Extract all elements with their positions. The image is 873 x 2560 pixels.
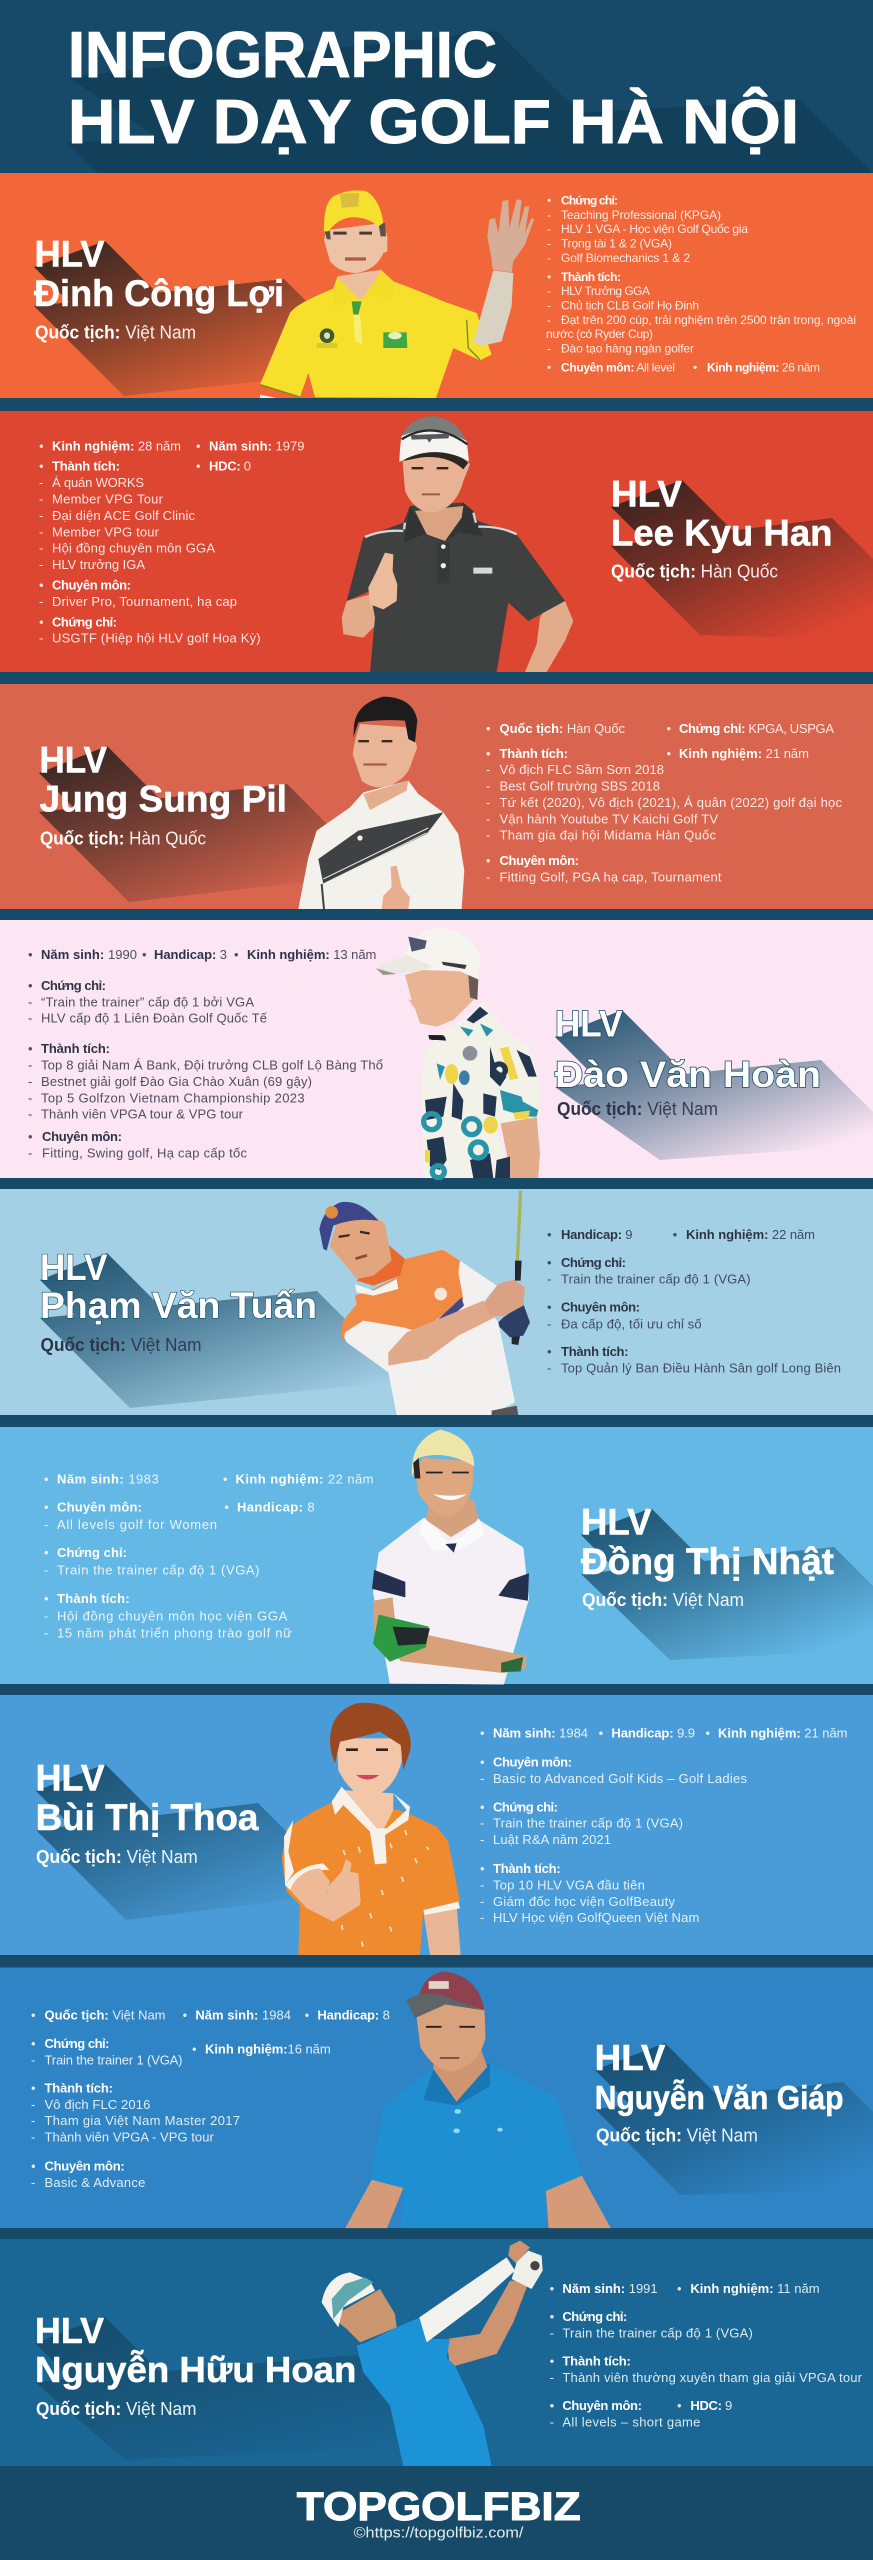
- info list: Thành tích:: [500, 746, 568, 761]
- info list: Kinh nghiệm: 21 năm: [718, 1726, 848, 1740]
- info list: -: [31, 2113, 35, 2128]
- info list: •: [486, 853, 491, 868]
- info list: Train the trainer cấp độ 1 (VGA): [57, 1563, 260, 1578]
- panel: Nguyễn Văn Giáp: [0, 1968, 873, 2228]
- info list: Member VPG Tour: [52, 492, 164, 507]
- info list: Năm sinh: 1983: [57, 1471, 159, 1486]
- info list: Basic & Advance: [44, 2175, 145, 2190]
- info list: “Train the trainer” cấp độ 1 bởi VGA: [41, 994, 254, 1009]
- info list: •: [599, 1726, 604, 1740]
- panel background: [0, 1189, 873, 1415]
- info list: •: [547, 1300, 552, 1315]
- title long shadow: [68, 31, 873, 173]
- coach name: Quốc tịch: Việt Nam: [40, 1335, 202, 1355]
- info list: Năm sinh: 1984: [195, 2008, 291, 2023]
- info list: Quốc tịch: Việt Nam: [44, 2008, 166, 2023]
- panel: Bùi Thị Thoa: [0, 1695, 873, 1955]
- info list: Handicap: 8: [317, 2008, 390, 2023]
- info list: Thành viên VPGA tour & VPG tour: [41, 1107, 244, 1122]
- shirt letter rings: [424, 1114, 440, 1130]
- info list: Kinh nghiệm: 11 năm: [690, 2281, 820, 2296]
- info list: Thành tích:: [561, 1344, 629, 1359]
- info list: -: [39, 557, 43, 572]
- info list: Kinh nghiệm: 13 năm: [247, 947, 376, 962]
- info list: •: [666, 746, 672, 761]
- info list: -: [547, 284, 551, 298]
- info list: •: [224, 1500, 229, 1515]
- info list: -: [31, 2129, 35, 2144]
- info list: Chứng chỉ:: [493, 1800, 558, 1814]
- info list: HLV cấp độ 1 Liên Đoàn Golf Quốc Tế: [41, 1011, 268, 1026]
- panel background: [0, 1427, 873, 1684]
- info list: -: [28, 994, 32, 1009]
- info list: Tứ kết (2020), Vô địch (2021), Á quân (2022) golf đại học: [500, 795, 842, 810]
- name shadow: [36, 1764, 348, 1920]
- info list: •: [547, 194, 551, 208]
- info list: HLV Trưởng GGA: [561, 284, 650, 298]
- info list: -: [486, 795, 490, 810]
- panel: Đồng Thị Nhật: [0, 1427, 873, 1684]
- info list: USGTF (Hiệp hội HLV golf Hoa Kỳ): [52, 631, 261, 646]
- coach name: Quốc tịch: Hàn Quốc: [40, 828, 206, 848]
- info list: All levels – short game: [562, 2415, 700, 2430]
- coach name: Nguyễn Hữu Hoan: [35, 2349, 356, 2390]
- info list: Hội đồng chuyên môn học viện GGA: [57, 1608, 288, 1623]
- info list: Thành tích:: [52, 459, 120, 474]
- info list: Á quán WORKS: [52, 475, 144, 490]
- info list: •: [28, 978, 33, 993]
- info list: Năm sinh: 1991: [562, 2281, 658, 2296]
- info list: -: [28, 1145, 32, 1160]
- info list: HLV Học viện GolfQueen Việt Nam: [493, 1910, 699, 1925]
- panel background: [0, 1968, 873, 2228]
- info list: -: [486, 828, 490, 843]
- panel: Phạm Văn Tuấn: [0, 1189, 873, 1415]
- coach name: Đào Văn Hoàn: [555, 1054, 821, 1095]
- info list: -: [486, 779, 490, 794]
- info list: All levels golf for Women: [57, 1517, 217, 1532]
- info list: •: [44, 1545, 49, 1560]
- info list: •: [480, 1861, 485, 1876]
- info list: -: [547, 208, 551, 222]
- info list: -: [39, 508, 43, 523]
- figure: coach in blue polo and maroon cap: [345, 1971, 611, 2228]
- name shadow: [39, 746, 377, 902]
- info list: Best Golf trường SBS 2018: [500, 779, 660, 794]
- panel: Jung Sung Pil: [0, 684, 873, 909]
- info list: -: [547, 342, 551, 356]
- info list: Bestnet giải golf Đào Gia Chào Xuân (69 gậy): [41, 1074, 312, 1089]
- coach name: [611, 474, 832, 582]
- info list: [39, 439, 304, 646]
- coach name: Đồng Thị Nhật: [581, 1541, 834, 1582]
- info list: Chứng chỉ:: [44, 2036, 110, 2051]
- coach name: [581, 1502, 834, 1610]
- info list: •: [305, 2008, 310, 2023]
- info list: •: [31, 2159, 36, 2174]
- info list: -: [44, 1517, 48, 1532]
- info list: Chứng chỉ:: [562, 2309, 627, 2324]
- info list: Thành tích:: [562, 2354, 631, 2369]
- info list: Thành tích:: [41, 1041, 110, 1056]
- coach name: Nguyễn Văn Giáp: [595, 2079, 844, 2116]
- info list: HLV trưởng IGA: [52, 557, 145, 572]
- info list: -: [480, 1877, 484, 1892]
- info list: -: [44, 1608, 48, 1623]
- footer url: ©https://topgolfbiz.com/: [354, 2524, 524, 2542]
- info list: Train the trainer cấp độ 1 (VGA): [493, 1816, 683, 1831]
- info list: -: [31, 2175, 35, 2190]
- info list: -: [480, 1771, 484, 1786]
- info list: •: [673, 1227, 678, 1242]
- info list: Thành tích:: [561, 270, 621, 284]
- info list: Tham gia đại hội Midama Hàn Quốc: [500, 828, 716, 843]
- info list: Chuyên môn:: [493, 1754, 572, 1769]
- panel background: [0, 684, 873, 909]
- info list: •: [550, 2309, 555, 2324]
- info list: Chuyên môn:: [44, 2159, 125, 2174]
- info list: •: [28, 1041, 33, 1056]
- info list: -: [550, 2370, 554, 2385]
- panel: Đinh Công Lợi: [0, 173, 873, 398]
- info list: Chứng chỉ:: [561, 194, 618, 208]
- info list: Giám đốc học viện GolfBeauty: [493, 1894, 676, 1909]
- info list: Handicap: 8: [237, 1500, 315, 1515]
- info list: [480, 1726, 848, 1925]
- coach name: Phạm Văn Tuấn: [40, 1285, 317, 1326]
- info list: -: [550, 2326, 554, 2340]
- figure: coach in white striped polo: [298, 697, 464, 909]
- info list: -: [480, 1816, 484, 1831]
- panel: Lee Kyu Han: [0, 411, 873, 672]
- info list: Train the trainer cấp độ 1 (VGA): [561, 1272, 751, 1287]
- name shadow: [35, 2316, 446, 2460]
- info list: Golf Biomechanics 1 & 2: [561, 251, 690, 265]
- panel background: [0, 2239, 873, 2466]
- info list: -: [547, 298, 551, 312]
- info list: -: [28, 1058, 32, 1073]
- info list: HDC: 0: [209, 459, 251, 474]
- coach name: [36, 1758, 259, 1867]
- info list: Top 5 Golfzon Vietnam Championship 2023: [41, 1091, 305, 1106]
- coach name: HLV: [611, 474, 682, 515]
- info list: Chứng chỉ:: [52, 614, 117, 629]
- coach name: HLV: [40, 740, 107, 781]
- info list: Basic to Advanced Golf Kids – Golf Ladies: [493, 1771, 748, 1786]
- info list: -: [39, 475, 43, 490]
- info list: [550, 2281, 863, 2430]
- info list: •: [677, 2398, 682, 2413]
- info list: HDC: 9: [690, 2398, 732, 2413]
- coach name: Quốc tịch: Việt Nam: [557, 1099, 718, 1119]
- coach name: [40, 740, 287, 848]
- info list: •: [183, 2008, 188, 2023]
- coach name: HLV: [581, 1502, 652, 1543]
- info list: -: [39, 631, 43, 646]
- info list: •: [196, 439, 201, 454]
- panel background: [0, 173, 873, 398]
- info list: Top 8 giải Nam Á Bank, Đội trưởng CLB golf Lộ Bàng Thổ: [41, 1058, 383, 1073]
- info list: Luật R&A năm 2021: [493, 1832, 611, 1847]
- info list: -: [39, 524, 43, 539]
- figure: coach in orange shirt swinging club: [319, 1191, 530, 1415]
- info list: [547, 1227, 841, 1376]
- info list: •: [550, 2281, 555, 2296]
- info list: Đào tạo hàng ngàn golfer: [561, 342, 694, 356]
- coach name: HLV: [555, 1004, 623, 1045]
- info list: -: [44, 1563, 48, 1578]
- info list: Teaching Professional (KPGA): [561, 208, 721, 222]
- info list: Kinh nghiệm: 22 năm: [686, 1227, 815, 1242]
- info list: Hội đồng chuyên môn GGA: [52, 541, 215, 556]
- info list: Thành tích:: [44, 2080, 113, 2095]
- info list: -: [28, 1091, 32, 1106]
- title line 2: HLV DẠY GOLF HÀ NỘI: [68, 88, 799, 157]
- info list: Kinh nghiệm: 21 năm: [679, 746, 809, 761]
- info list: Fitting, Swing golf, Hạ cap cấp tốc: [42, 1145, 248, 1160]
- info list: -: [39, 492, 43, 507]
- info list: •: [196, 459, 201, 474]
- panel: Nguyễn Hữu Hoan: [0, 2239, 873, 2466]
- info list: Chứng chỉ:: [57, 1545, 127, 1560]
- info list: •: [486, 746, 491, 761]
- info list: Handicap: 3: [154, 947, 227, 962]
- coach name: Bùi Thị Thoa: [36, 1797, 259, 1838]
- info list: •: [480, 1800, 485, 1814]
- info list: -: [31, 2052, 35, 2067]
- info list: •: [39, 614, 44, 629]
- info list: Member VPG tour: [52, 524, 160, 539]
- figure: woman coach in white polo with crossed arms: [372, 1430, 529, 1684]
- info list: [31, 2008, 390, 2190]
- info list: Kinh nghiệm: 28 năm: [52, 439, 181, 454]
- info list: -: [39, 594, 43, 609]
- info list: -: [547, 1316, 551, 1331]
- info list: Handicap: 9.9: [611, 1726, 695, 1740]
- figure: woman coach in orange polo thumbs up: [282, 1703, 461, 1955]
- coach name: [595, 2037, 844, 2145]
- info list: -: [480, 1832, 484, 1847]
- info list: •: [547, 360, 551, 374]
- info list: Top 10 HLV VGA đầu tiên: [493, 1877, 645, 1892]
- coach name: [555, 1004, 821, 1119]
- info list: Chứng chỉ: KPGA, USPGA: [679, 721, 834, 736]
- footer logo: TOPGOLFBIZ: [297, 2485, 581, 2529]
- info list: •: [234, 947, 239, 962]
- coach name: [40, 1247, 317, 1355]
- info list: •: [480, 1754, 485, 1769]
- info list: Thành viên VPGA - VPG tour: [44, 2129, 214, 2144]
- info list: •: [31, 2008, 36, 2023]
- info list: •: [28, 1129, 33, 1144]
- info list: -: [39, 541, 43, 556]
- info list: -: [547, 222, 551, 236]
- info list: •: [31, 2036, 36, 2051]
- info list: Đạt trên 200 cúp, trải nghiệm trên 2500 trận trong, ngoài: [561, 313, 856, 327]
- panel background: [0, 411, 873, 672]
- info list: -: [28, 1107, 32, 1122]
- info list: Năm sinh: 1990: [41, 947, 137, 962]
- info list: Chuyên môn:: [52, 578, 131, 593]
- info list: -: [547, 1272, 551, 1287]
- info list: Năm sinh: 1984: [493, 1726, 588, 1740]
- info list: Thành viên thường xuyên tham gia giải VPGA tour: [562, 2370, 863, 2385]
- info list: Kinh nghiệm:16 năm: [205, 2042, 331, 2056]
- info list: -: [547, 313, 551, 327]
- info list: Quốc tịch: Hàn Quốc: [500, 721, 626, 736]
- info list: -: [547, 1361, 551, 1376]
- coach name: HLV: [35, 2310, 104, 2351]
- info list: •: [44, 1591, 49, 1606]
- info list: •: [480, 1726, 485, 1740]
- info list: Chủ tịch CLB Golf Họ Đinh: [561, 298, 699, 312]
- info list: -: [486, 811, 490, 826]
- coach name: Quốc tịch: Việt Nam: [36, 1847, 198, 1867]
- figure: coach in blue shirt mid swing: [322, 2241, 543, 2466]
- info list: -: [28, 1074, 32, 1089]
- name shadow: [40, 1253, 407, 1408]
- info list: Thành tích:: [57, 1591, 130, 1606]
- info list: •: [223, 1471, 228, 1486]
- info list: Chứng chỉ:: [41, 978, 106, 993]
- info list: -: [31, 2097, 35, 2112]
- coach name: Đinh Công Lợi: [34, 273, 284, 314]
- info list: •: [44, 1500, 49, 1515]
- info list: •: [486, 721, 491, 736]
- info list: Chuyên môn:: [562, 2398, 642, 2413]
- info list: Tham gia Việt Nam Master 2017: [44, 2113, 240, 2128]
- info list: -: [550, 2415, 554, 2430]
- info list: Handicap: 9: [561, 1227, 632, 1242]
- info list: •: [39, 459, 44, 474]
- info list: •: [28, 947, 33, 962]
- info list: Vô địch FLC 2016: [44, 2097, 150, 2112]
- name shadow: [581, 1508, 873, 1660]
- title: [68, 18, 873, 173]
- figure: coach in grey polo thumbs up: [342, 416, 573, 672]
- info list: 15 năm phát triển phong trào golf nữ: [57, 1626, 292, 1641]
- info list: •: [31, 2080, 36, 2095]
- info list: •: [547, 270, 551, 284]
- info list: -: [486, 869, 490, 884]
- info list: •: [39, 439, 44, 454]
- info list: •: [142, 947, 147, 962]
- info list: -: [547, 236, 551, 250]
- info list: Chứng chỉ:: [561, 1255, 626, 1270]
- name shadow: [611, 480, 873, 640]
- info list: •: [547, 1255, 552, 1270]
- info list: Thành tích:: [493, 1861, 561, 1876]
- info list: Vô địch FLC Sầm Sơn 2018: [500, 762, 664, 777]
- figure: coach in yellow polo waving: [260, 190, 534, 398]
- coach name: Quốc tịch: Việt Nam: [582, 1590, 744, 1610]
- info list: •: [547, 1227, 552, 1242]
- info list: Chuyên môn:: [42, 1129, 122, 1144]
- coach name: [34, 234, 284, 342]
- info list: •: [666, 721, 672, 736]
- coach name: HLV: [40, 1247, 108, 1288]
- coach name: [35, 2310, 356, 2419]
- info list: -: [547, 251, 551, 265]
- info list: •: [693, 360, 697, 374]
- footer: [297, 2485, 581, 2542]
- info list: •: [550, 2398, 555, 2413]
- coach name: Lee Kyu Han: [611, 513, 832, 554]
- coach name: Quốc tịch: Hàn Quốc: [611, 562, 778, 582]
- name shadow: [595, 2043, 873, 2195]
- info list: [44, 1471, 374, 1641]
- info list: •: [44, 1471, 49, 1486]
- info list: -: [44, 1626, 48, 1641]
- info list: Đại diện ACE Golf Clinic: [52, 508, 196, 523]
- coach name: HLV: [34, 234, 105, 275]
- info list: Chuyên môn:: [561, 1300, 640, 1315]
- info list: Train the trainer cấp độ 1 (VGA): [562, 2326, 753, 2340]
- panel background: [0, 1695, 873, 1955]
- info list: •: [192, 2042, 197, 2056]
- coach name: HLV: [595, 2037, 665, 2078]
- info list: Chuyên môn: All level: [561, 360, 675, 374]
- info list: [546, 194, 856, 374]
- info list: •: [39, 578, 44, 593]
- info list: -: [28, 1011, 32, 1026]
- info list: -: [486, 762, 490, 777]
- panel background: [0, 920, 873, 1178]
- info list: Chuyên môn:: [500, 853, 579, 868]
- info list: Kinh nghiệm: 26 năm: [707, 360, 820, 374]
- info list: -: [480, 1894, 484, 1909]
- info list: Fitting Golf, PGA hạ cap, Tournament: [500, 869, 722, 884]
- info list: Train the trainer 1 (VGA): [44, 2052, 182, 2067]
- info list: Driver Pro, Tournament, hạ cap: [52, 594, 237, 609]
- info list: -: [480, 1910, 484, 1925]
- coach name: Quốc tịch: Việt Nam: [596, 2125, 758, 2145]
- info list: •: [550, 2354, 555, 2369]
- info list: Kinh nghiệm: 22 năm: [236, 1471, 374, 1486]
- name shadow: [555, 1010, 873, 1160]
- coach name: HLV: [36, 1758, 105, 1798]
- info list: Top Quản lý Ban Điều Hành Sân golf Long Biên: [561, 1361, 841, 1376]
- coach name: Quốc tịch: Việt Nam: [35, 322, 196, 342]
- name shadow: [34, 241, 374, 396]
- coach name: Quốc tịch: Việt Nam: [36, 2399, 196, 2419]
- info list: •: [706, 1726, 710, 1740]
- info list: Vận hành Youtube TV Kaichi Golf TV: [500, 811, 718, 826]
- coach name: Jung Sung Pil: [40, 779, 287, 820]
- info list: [486, 721, 842, 884]
- info list: Trọng tài 1 & 2 (VGA): [561, 236, 672, 250]
- info list: •: [547, 1344, 552, 1359]
- info list: •: [677, 2281, 682, 2296]
- info list: Chuyên môn:: [57, 1500, 142, 1515]
- panel: Đào Văn Hoàn: [0, 920, 873, 1178]
- info list: nước (có Ryder Cup): [546, 327, 653, 341]
- info list: Đa cấp độ, tối ưu chỉ số: [561, 1316, 702, 1331]
- figure: coach in patterned polo and white cap: [376, 927, 540, 1178]
- info list: [28, 947, 383, 1160]
- info list: HLV 1 VGA - Học viện Golf Quốc gia: [561, 222, 748, 236]
- title line 1: INFOGRAPHIC: [68, 18, 497, 91]
- info list: Năm sinh: 1979: [209, 439, 304, 454]
